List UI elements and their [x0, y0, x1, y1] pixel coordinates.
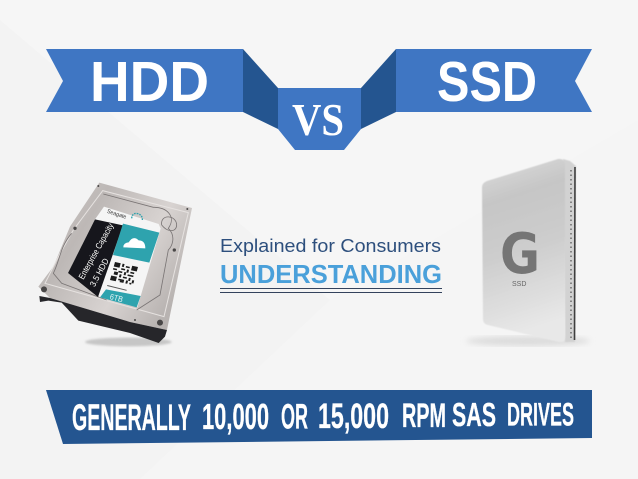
label: 6TB: [109, 292, 124, 304]
SSD shadow: [466, 336, 590, 346]
right fold: [361, 49, 396, 129]
SSD label: SSD: [512, 281, 526, 288]
banner text: RPM: [402, 397, 446, 435]
header ribbon: [46, 49, 592, 150]
label: [68, 207, 161, 307]
QR caption: [107, 285, 127, 291]
left ribbon: HDD: HDD: [90, 50, 209, 114]
SSD front: [482, 159, 565, 342]
SSD illustration: [466, 159, 590, 346]
banner text: SAS: [452, 396, 496, 433]
banner text: 10,000: [202, 396, 269, 437]
banner text: GENERALLY: [72, 397, 191, 438]
center tab: VS: VS: [292, 95, 344, 145]
G logo: G: [500, 222, 540, 287]
label text: Enterprise Capacity: [76, 221, 116, 281]
QR code: [110, 262, 138, 285]
left fold: [243, 49, 278, 129]
banner text: 15,000: [318, 397, 389, 436]
left ribbon: HDD: [46, 49, 243, 114]
Seagate logo swirl: [132, 213, 142, 221]
banner text: OR: [281, 398, 308, 436]
drive base edge: [39, 296, 167, 343]
drive shadow: [85, 338, 172, 346]
cloud icon: [123, 238, 145, 248]
underline: [220, 288, 442, 293]
screws: [41, 185, 188, 326]
subtitle text: [220, 236, 442, 293]
bottom banner: [46, 390, 592, 444]
banner text: DRIVES: [507, 396, 574, 432]
right ribbon: SSD: SSD: [437, 50, 537, 114]
hard disk drive illustration: [38, 183, 192, 346]
label: 3.5 HDD: [88, 256, 111, 288]
subtitle line: Explained for Consumers: [220, 236, 441, 256]
platter recess lines: [45, 191, 188, 317]
label: Seagate: [106, 209, 127, 221]
banner text: [72, 396, 574, 438]
right ribbon: SSD: [396, 49, 592, 114]
main word: UNDERSTANDING: [220, 259, 442, 289]
drive body: [38, 183, 192, 330]
SSD side: [563, 159, 576, 342]
center tab: VS: [278, 88, 361, 150]
